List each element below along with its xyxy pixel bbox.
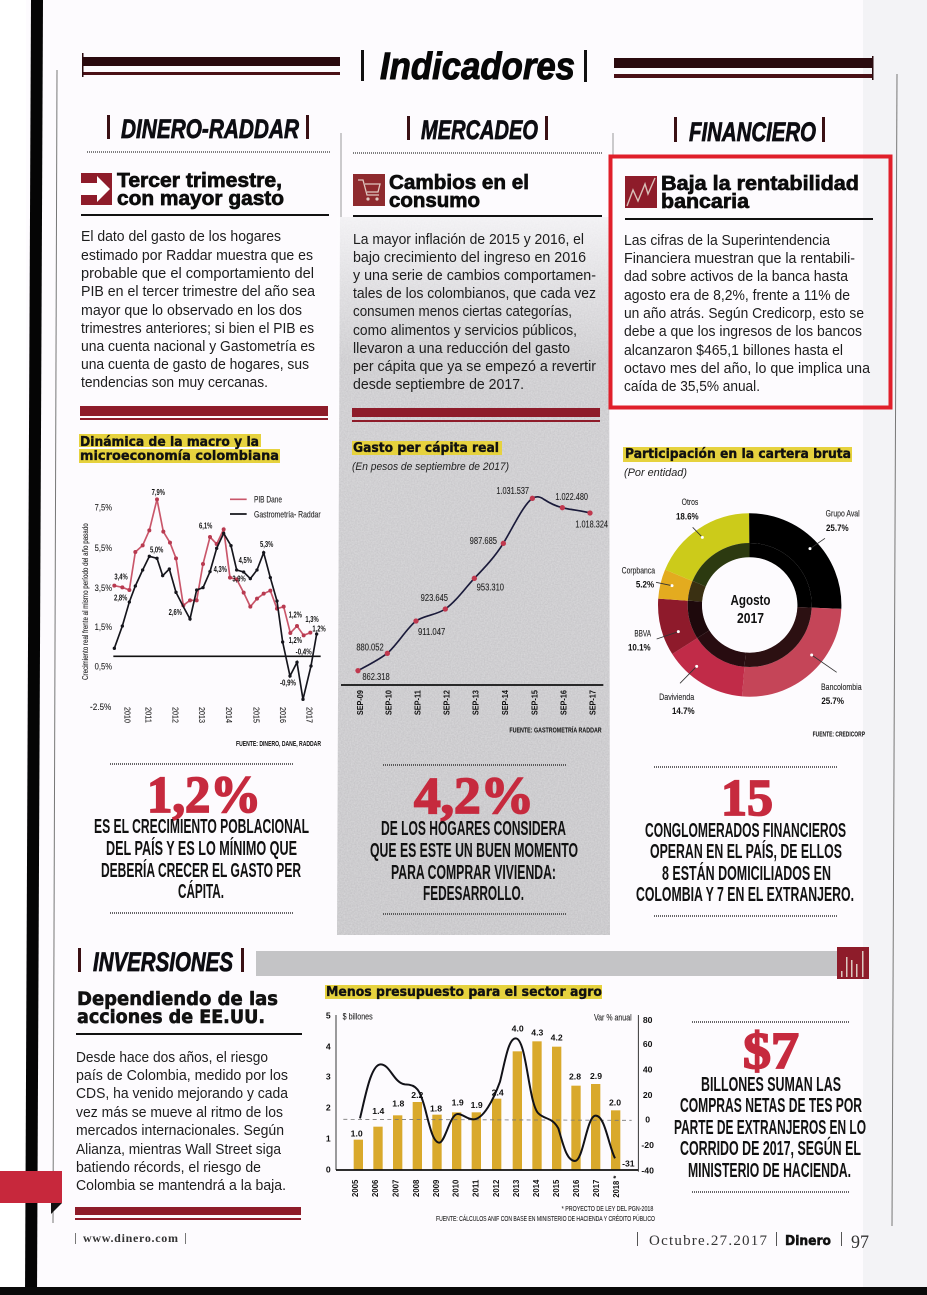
source: FUENTE: GASTROMETRÍA RADDAR xyxy=(509,726,602,735)
body text: probable que el comportamiento del xyxy=(81,266,314,282)
footnotes: * PROYECTO DE LEY DEL PGN-2018 xyxy=(562,1206,653,1213)
headline xyxy=(117,170,284,210)
body text xyxy=(76,1050,289,1194)
leaders and labels: 14.7% xyxy=(672,706,695,716)
callout: 1,2% xyxy=(94,764,309,913)
right axis: 80 xyxy=(643,1015,653,1025)
x axis labels: SEP-11 xyxy=(412,690,422,715)
body text xyxy=(81,229,316,391)
center label xyxy=(730,592,770,627)
leaders and labels: 10.1% xyxy=(628,643,651,653)
footer right xyxy=(637,1232,869,1253)
left axis: 5 xyxy=(326,1011,331,1021)
body text: tendencias son muy cercanas. xyxy=(81,375,268,391)
year labels: 2009 xyxy=(431,1180,441,1197)
body text: bajo crecimiento del ingreso en 2016 xyxy=(353,250,586,266)
body text: PIB en el tercer trimestre del año sea xyxy=(81,284,316,300)
data labels: 5,3% xyxy=(260,539,274,549)
left axis: 4 xyxy=(326,1042,331,1052)
headline xyxy=(77,988,278,1028)
x axis labels: SEP-10 xyxy=(383,690,393,715)
units xyxy=(343,1012,632,1023)
x axis labels: SEP-12 xyxy=(442,690,452,715)
body text: octavo mes del año, lo que implica una xyxy=(624,361,871,377)
panel: Inversiones article xyxy=(75,988,302,1220)
year labels: 2011 xyxy=(144,707,154,723)
year labels: 2010 xyxy=(451,1180,461,1197)
donut chart: cartera bruta xyxy=(622,497,865,739)
body text: llevaron a una reducción del gasto xyxy=(353,341,570,357)
body text: caída de 35,5% anual. xyxy=(624,379,760,395)
data labels: 2.8 xyxy=(569,1072,581,1082)
callout: $7 xyxy=(674,1022,866,1192)
year labels: 2016 xyxy=(278,707,288,723)
data labels: 3,4% xyxy=(114,571,128,581)
y axis labels: 1,5% xyxy=(95,622,112,632)
data labels: 2.0 xyxy=(609,1098,621,1108)
leaders and labels: Bancolombia xyxy=(821,682,862,692)
data labels: -31 xyxy=(622,1158,635,1168)
data labels xyxy=(351,1023,635,1168)
legend xyxy=(230,495,321,519)
data labels: 1,2% xyxy=(289,610,302,620)
headline: consumo xyxy=(389,190,480,212)
chart heading: Gasto per cápita real: (En pesos de septiembre de 2017) xyxy=(352,461,509,473)
panel: Financiero article with red frame xyxy=(610,156,890,408)
data labels: 911.047 xyxy=(418,627,445,638)
body text: consumen menos ciertas categorías, xyxy=(353,304,572,320)
callout: 4,2%: FEDESARROLLO. xyxy=(423,882,524,905)
body text: Desde hace dos años, el riesgo xyxy=(76,1050,268,1066)
icon: bars xyxy=(837,947,869,979)
right axis: 40 xyxy=(643,1064,653,1074)
callout: 1,2%: CÁPITA. xyxy=(178,880,224,903)
footer left: www.dinero.com xyxy=(83,1231,178,1245)
section heading: Inversiones xyxy=(78,947,869,979)
data labels: 2.2 xyxy=(411,1090,424,1100)
headline: bancaria xyxy=(661,191,750,213)
year labels: 2008 xyxy=(411,1180,421,1197)
data labels: 1.8 xyxy=(430,1103,442,1113)
section heading: Financiero: FINANCIERO xyxy=(689,117,816,147)
body text: trimestres anteriores; si bien el PIB es xyxy=(81,321,314,337)
body text: mercados internacionales. Según xyxy=(76,1123,284,1139)
body text: debe a que los ingresos de los bancos xyxy=(624,324,862,340)
body text: Colombia se mantendrá a la baja. xyxy=(76,1178,286,1194)
body text: Financiera muestran que la rentabili- xyxy=(624,251,855,267)
body text: vez más se mueve al ritmo de los xyxy=(76,1105,283,1121)
section heading: Inversiones: INVERSIONES xyxy=(93,947,233,977)
year labels: 2017 xyxy=(591,1180,601,1197)
left axis: 3 xyxy=(326,1072,331,1082)
data labels: 4,3% xyxy=(214,564,227,574)
year labels: 2014 xyxy=(224,707,234,723)
data labels: 4,5% xyxy=(239,555,252,565)
headline: Baja la rentabilidad xyxy=(661,173,859,195)
headline: con mayor gasto xyxy=(117,188,284,210)
center label: Agosto xyxy=(730,592,770,609)
chart heading: Menos presupuesto: Menos presupuesto para el sector agro xyxy=(326,985,602,1000)
year labels: 2017 xyxy=(305,707,315,723)
x axis labels: SEP-15 xyxy=(529,690,539,715)
right axis: -20 xyxy=(641,1140,654,1150)
x axis labels: SEP-16 xyxy=(558,690,568,715)
body text: batiendo récords, el riesgo de xyxy=(76,1160,261,1176)
y axis labels: 3,5% xyxy=(95,583,112,593)
x axis labels xyxy=(355,690,597,715)
body text: La mayor inflación de 2015 y 2016, el xyxy=(353,232,584,248)
right axis: -40 xyxy=(641,1166,654,1176)
body text: y una serie de cambios comportamen- xyxy=(353,268,596,284)
data labels: 3,9% xyxy=(232,573,246,583)
icon: arrow xyxy=(81,173,112,205)
series line xyxy=(355,496,593,673)
body text: agosto era de 8,2%, frente a 11% de xyxy=(624,288,850,304)
callout: 4,2%: PARA COMPRAR VIVIENDA: xyxy=(391,861,556,884)
year labels: 2013 xyxy=(197,707,207,723)
data labels: 2,6% xyxy=(169,607,182,617)
left axis: 0 xyxy=(326,1164,331,1174)
x axis labels: SEP-14 xyxy=(500,690,510,715)
body text: un año atrás. Según Credicorp, esto se xyxy=(624,306,864,322)
y axis labels: 5,5% xyxy=(95,543,112,553)
source: FUENTE: CREDICORP xyxy=(813,730,865,739)
y axis labels: Crecimiento real frente al mismo período del año pasado xyxy=(81,523,90,680)
left axis: 2 xyxy=(326,1103,331,1113)
body text: El dato del gasto de los hogares xyxy=(81,229,281,245)
page header xyxy=(82,46,874,88)
year labels: 2012 xyxy=(170,707,180,723)
series: PIB Dane xyxy=(112,497,312,637)
units: $ billones xyxy=(343,1012,373,1022)
headline: Cambios en el xyxy=(389,172,529,194)
right axis: 0 xyxy=(645,1114,650,1124)
footer right: Octubre.27.2017 xyxy=(649,1233,768,1249)
year labels: 2016 xyxy=(571,1180,581,1197)
leaders and labels: Grupo Aval xyxy=(826,509,860,519)
year labels: 2010 xyxy=(122,707,132,723)
data labels: 923.645 xyxy=(421,593,448,604)
x axis labels: SEP-17 xyxy=(587,690,597,715)
y axis labels xyxy=(81,503,112,712)
leaders and labels xyxy=(622,497,865,739)
headline xyxy=(661,173,859,213)
left axis xyxy=(326,1011,331,1174)
body text: estimado por Raddar muestra que es xyxy=(81,248,313,264)
data labels: 6,1% xyxy=(199,521,213,531)
year labels: 2013 xyxy=(511,1180,521,1197)
chart heading: Participación en la cartera bruta xyxy=(623,447,852,479)
data labels: 1.031.537 xyxy=(496,486,529,497)
data labels: 1.018.324 xyxy=(575,519,608,530)
callout: 4,2%: 4,2% xyxy=(414,768,534,825)
red page tab xyxy=(0,1171,62,1214)
body text: tales de los colombianos, que cada vez xyxy=(353,286,596,302)
source: FUENTE: DINERO, DANE, RADDAR xyxy=(236,739,321,748)
data labels: 880.052 xyxy=(356,643,384,654)
body text: una cuenta de gasto de hogares, sus xyxy=(81,357,309,373)
year labels: 2015 xyxy=(551,1180,561,1197)
chart heading: Gasto per cápita real xyxy=(352,441,509,473)
callout: $7: BILLONES SUMAN LAS xyxy=(701,1073,841,1096)
callout: 1,2%: DEL PAÍS Y ES LO MÍNIMO QUE xyxy=(106,837,297,860)
leaders and labels: BBVA xyxy=(634,629,651,639)
y axis labels: 0,5% xyxy=(95,661,112,671)
panel: Dinero-Raddar article xyxy=(80,170,329,420)
leaders and labels: Otros xyxy=(682,497,699,507)
data labels xyxy=(356,486,608,683)
year labels: 2018 * xyxy=(611,1175,621,1198)
data labels: 953.310 xyxy=(477,583,504,594)
data labels: 1,3% xyxy=(305,614,319,624)
middle column grey panel xyxy=(337,217,610,935)
body text: mayor que lo observado en los dos xyxy=(81,303,302,319)
footnotes xyxy=(436,1206,655,1223)
body text: CDS, ha venido mejorando y cada xyxy=(76,1086,289,1102)
footnotes: FUENTE: CÁLCULOS ANIF CON BASE EN MINISTERIO DE HACIENDA Y CRÉDITO PÚBLICO xyxy=(436,1214,655,1223)
variation line xyxy=(360,1038,615,1161)
data labels: 862.318 xyxy=(362,672,390,683)
x axis labels: SEP-09 xyxy=(355,690,365,715)
outer ring segments xyxy=(673,528,827,682)
icon: shopping cart xyxy=(353,174,385,206)
body text: país de Colombia, medido por los xyxy=(76,1068,288,1084)
series: Gastrometría Raddar xyxy=(113,532,318,701)
data labels: 2,8% xyxy=(114,592,128,602)
year labels xyxy=(350,1175,621,1198)
year labels: 2005 xyxy=(350,1180,360,1197)
callout: 4,2% xyxy=(370,765,578,914)
year labels xyxy=(122,707,315,723)
headline xyxy=(389,172,529,212)
headline: Tercer trimestre, xyxy=(117,170,282,192)
body text: dad sobre activos de la banca hasta xyxy=(624,269,849,285)
data labels: -0,4% xyxy=(296,646,312,656)
chart heading: Dinámica de la macro: Dinámica de la macro y la xyxy=(80,435,259,450)
callout: 1,2%: ES EL CRECIMIENTO POBLACIONAL xyxy=(94,815,309,838)
chart heading: Participación en la cartera bruta: Participación en la cartera bruta xyxy=(625,447,851,462)
callout: 4,2%: DE LOS HOGARES CONSIDERA xyxy=(381,817,566,840)
icon: falling chart xyxy=(625,176,657,208)
y axis labels: 7,5% xyxy=(95,503,112,513)
year labels: 2007 xyxy=(391,1180,401,1197)
right axis: 60 xyxy=(643,1039,653,1049)
data labels: 1.0 xyxy=(351,1128,363,1138)
bar and line chart: presupuesto agro xyxy=(326,1011,655,1223)
data labels: 7,9% xyxy=(152,487,165,497)
chart heading: Dinámica de la macro xyxy=(79,434,280,464)
callout: 4,2%: QUE ES ESTE UN BUEN MOMENTO xyxy=(370,839,578,862)
year labels: 2015 xyxy=(251,707,261,723)
data labels: 1,2% xyxy=(312,624,326,634)
data labels: 1.022.480 xyxy=(555,492,588,503)
title: Indicadores xyxy=(380,46,575,88)
data labels: 1.8 xyxy=(392,1098,405,1108)
legend: Gastrometría- Raddar xyxy=(254,509,321,519)
data labels: 1.9 xyxy=(452,1098,464,1108)
section heading: Dinero-Raddar: DINERO-RADDAR xyxy=(121,114,299,144)
callout: 15 xyxy=(636,767,854,916)
leaders and labels: 18.6% xyxy=(676,511,699,521)
line chart: macro and microeconomy xyxy=(81,487,326,748)
units: Var % anual xyxy=(594,1013,632,1023)
data labels: 1,2% xyxy=(289,635,302,645)
leaders and labels: Corpbanca xyxy=(622,565,655,575)
headline: acciones de EE.UU. xyxy=(77,1006,265,1028)
data labels: 5,0% xyxy=(150,544,164,554)
data labels xyxy=(114,487,326,687)
right axis xyxy=(641,1015,654,1176)
right axis: 20 xyxy=(643,1090,653,1100)
left axis: 1 xyxy=(326,1133,331,1143)
data labels: 1.9 xyxy=(471,1100,483,1110)
body text: Las cifras de la Superintendencia xyxy=(624,233,831,249)
panel: Mercadeo article xyxy=(352,172,602,422)
callout: $7: $7 xyxy=(743,1023,799,1080)
data labels: 4.3 xyxy=(531,1027,544,1037)
leaders and labels: 25.7% xyxy=(826,523,849,533)
section heading: Mercadeo: MERCADEO xyxy=(421,115,538,145)
inner ring segments xyxy=(695,550,805,660)
data labels: 4.2 xyxy=(551,1033,563,1043)
year labels: 2014 xyxy=(531,1180,541,1197)
chart heading: Participación en la cartera bruta: (Por entidad) xyxy=(624,467,687,479)
legend: PIB Dane xyxy=(254,495,282,505)
body text xyxy=(353,232,596,393)
data labels: 4.0 xyxy=(512,1023,524,1033)
data labels: 2.4 xyxy=(492,1087,504,1097)
chart heading: Gasto per cápita real: Gasto per cápita real xyxy=(353,441,499,456)
headline: Dependiendo de las xyxy=(77,988,278,1010)
data labels: 2.9 xyxy=(590,1071,602,1081)
x axis labels: SEP-13 xyxy=(471,690,481,715)
center label: 2017 xyxy=(737,610,764,627)
body text: como alimentos y servicios públicos, xyxy=(353,323,577,339)
year labels: 2011 xyxy=(471,1179,481,1197)
leaders and labels: Davivienda xyxy=(659,692,694,702)
bars xyxy=(354,1041,620,1170)
body text: una cuenta nacional y Gastometría es xyxy=(81,339,315,355)
body text: alcanzaron $465,1 billones hasta el xyxy=(624,343,843,359)
data labels: 1.4 xyxy=(372,1106,385,1116)
body text xyxy=(624,233,871,395)
callout: 1,2%: 1,2% xyxy=(147,767,261,824)
footer right: 97 xyxy=(851,1232,869,1253)
year labels: 2006 xyxy=(370,1180,380,1197)
body text: desde septiembre de 2017. xyxy=(353,377,524,393)
line chart: gasto per cápita xyxy=(341,486,608,735)
leaders and labels: 25.7% xyxy=(821,696,844,706)
y axis labels: -2.5% xyxy=(90,702,111,712)
chart heading: Dinámica de la macro: microeconomía colombiana xyxy=(80,449,279,464)
leaders and labels: 5.2% xyxy=(636,579,654,589)
callout: 1,2%: DEBERÍA CRECER EL GASTO PER xyxy=(101,859,301,882)
footer right: Dinero xyxy=(785,1234,831,1249)
callout: 15: 15 xyxy=(721,770,773,827)
year labels: 2012 xyxy=(491,1180,501,1197)
body text: per cápita que ya se empezó a revertir xyxy=(353,359,596,375)
body text: Alianza, mientras Wall Street siga xyxy=(76,1142,282,1158)
data labels: -0,9% xyxy=(280,677,296,687)
data labels: 987.685 xyxy=(470,536,497,547)
